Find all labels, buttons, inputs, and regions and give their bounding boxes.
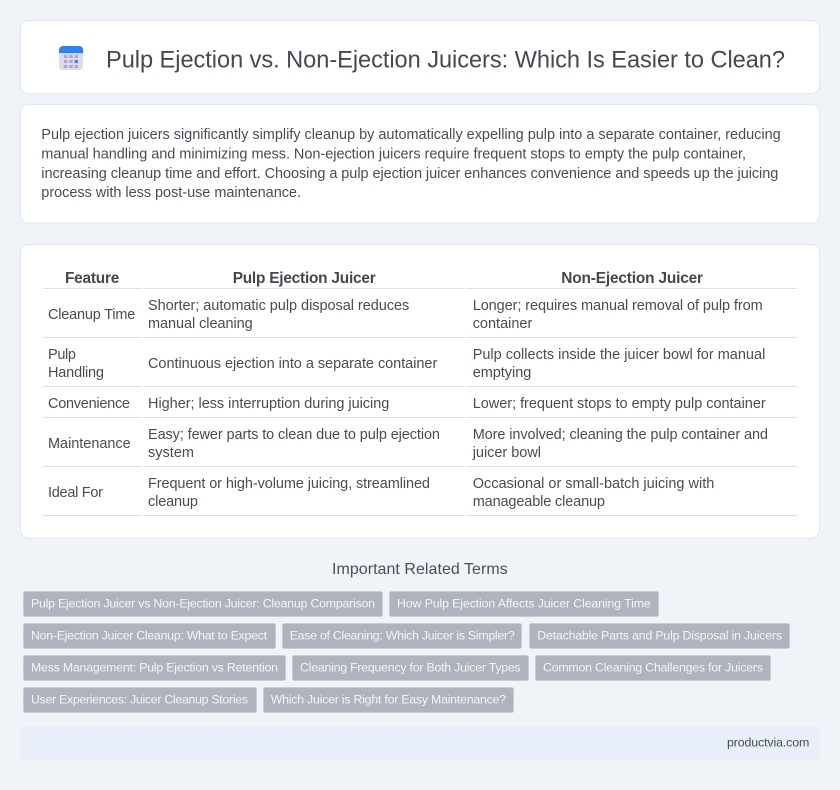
table row: maintenance: Maintenance: [48, 436, 131, 452]
table header row: Pulp Ejection Juicer: [233, 270, 376, 287]
tag: Detachable Parts and Pulp Disposal in Juicers: [537, 628, 782, 642]
panel: related term tags: [24, 592, 790, 712]
icon: calendar: [59, 46, 83, 70]
tag: Common Cleaning Challenges for Juicers: [543, 660, 763, 674]
tag: Non-Ejection Juicer Cleanup: What to Expect: [31, 628, 268, 642]
tag: [292, 656, 528, 680]
footer source: productvia.com: [727, 736, 809, 750]
footer: [20, 726, 820, 760]
table row: maintenance: system: [148, 445, 194, 461]
table row: convenience: Lower; frequent stops to empty pulp container: [473, 396, 766, 412]
table row: maintenance: [43, 427, 797, 467]
table row: ideal for: [43, 476, 797, 516]
tag: [536, 656, 770, 680]
text block: introduction paragraph: manual handling and minimizing mess. Non-ejection juicers require frequent stops to empty the pulp container,: [41, 146, 746, 162]
tag: [24, 592, 382, 616]
table row: convenience: Higher; less interruption during juicing: [148, 396, 389, 412]
table row: cleanup time: [43, 298, 797, 338]
title: Pulp Ejection vs. Non-Ejection Juicers: Which Is Easier to Clean?: [106, 48, 785, 74]
tag: [24, 656, 286, 680]
tag: [530, 624, 790, 648]
table row: cleanup time: manual cleaning: [148, 316, 253, 332]
table row: cleanup time: Shorter; automatic pulp disposal reduces: [148, 298, 409, 314]
tag: User Experiences: Juicer Cleanup Stories: [31, 692, 248, 706]
table row: convenience: [43, 396, 797, 418]
table row: cleanup time: Cleanup Time: [48, 307, 135, 323]
table row: pulp handling: Pulp collects inside the juicer bowl for manual: [473, 347, 765, 363]
table row: maintenance: juicer bowl: [472, 445, 541, 461]
tag: Ease of Cleaning: Which Juicer is Simpler?: [290, 628, 515, 642]
table row: ideal for: Frequent or high-volume juicing, streamlined: [148, 476, 430, 492]
table header row: [43, 270, 797, 289]
text block: introduction paragraph: [41, 127, 781, 201]
table row: convenience: Convenience: [48, 396, 130, 412]
tag: [390, 592, 658, 616]
table row: ideal for: Ideal For: [48, 485, 103, 501]
heading: important related terms: Important Related Terms: [332, 561, 508, 578]
tag: [24, 624, 276, 648]
panel: introduction: [20, 104, 820, 223]
tag: [282, 624, 522, 648]
tag: Which Juicer is Right for Easy Maintenance?: [271, 692, 506, 706]
tag: Cleaning Frequency for Both Juicer Types: [300, 660, 521, 674]
tag: [264, 688, 514, 712]
panel: comparison table: [20, 244, 820, 538]
table row: ideal for: Occasional or small-batch juicing with: [473, 476, 714, 492]
tag: [24, 688, 256, 712]
text block: introduction paragraph: process with less post-use maintenance.: [41, 185, 301, 201]
table row: maintenance: Easy; fewer parts to clean due to pulp ejection: [148, 427, 440, 443]
tag: Pulp Ejection Juicer vs Non-Ejection Juicer: Cleanup Comparison: [31, 596, 375, 610]
table row: cleanup time: Longer; requires manual removal of pulp from: [473, 298, 763, 314]
table row: maintenance: More involved; cleaning the pulp container and: [473, 427, 768, 443]
text block: introduction paragraph: increasing cleanup time and effort. Choosing a pulp ejection juicer enhances convenience and speeds up the juicing: [41, 166, 778, 182]
table row: pulp handling: Pulp: [48, 347, 76, 363]
table header row: Non-Ejection Juicer: [561, 270, 703, 287]
table row: pulp handling: Continuous ejection into a separate container: [148, 356, 437, 372]
table row: ideal for: cleanup: [148, 494, 198, 510]
table row: cleanup time: container: [473, 316, 532, 332]
text block: introduction paragraph: Pulp ejection juicers significantly simplify cleanup by automatically expelling pulp into a separate container, reducing: [41, 127, 781, 143]
table header row: Feature: [65, 270, 120, 287]
table row: ideal for: manageable cleanup: [473, 494, 605, 510]
table row: pulp handling: emptying: [473, 365, 531, 381]
table row: pulp handling: Handling: [48, 365, 104, 381]
table row: pulp handling: [43, 347, 797, 387]
tag: Mess Management: Pulp Ejection vs Retention: [31, 660, 278, 674]
panel: header: [20, 20, 820, 94]
tag: How Pulp Ejection Affects Juicer Cleaning Time: [397, 596, 651, 610]
